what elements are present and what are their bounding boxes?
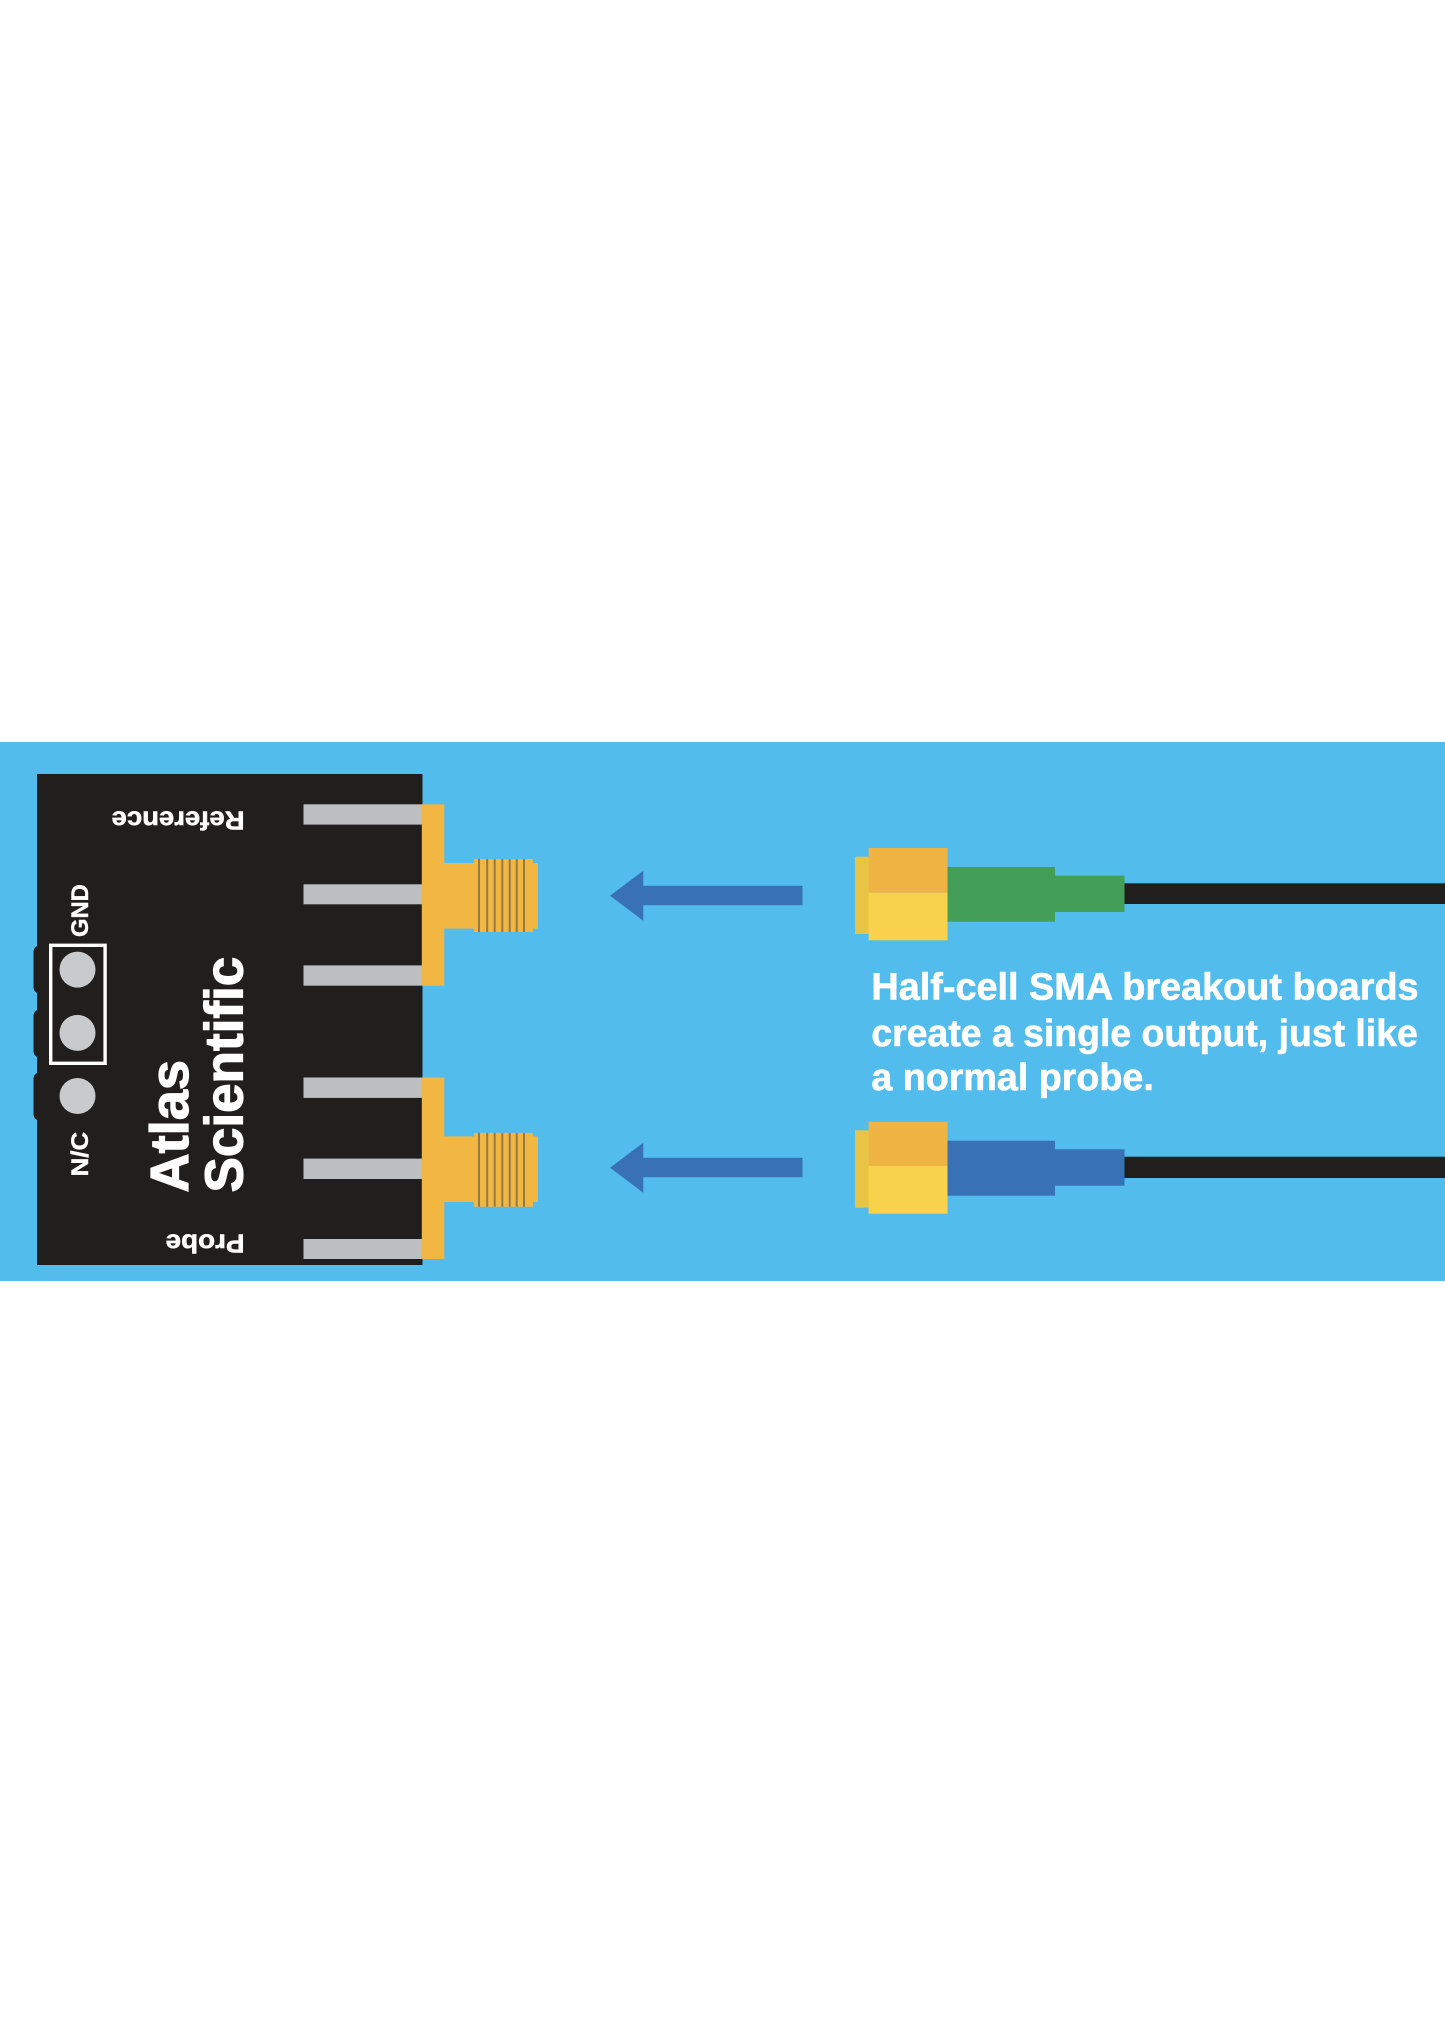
arrow: bottom, pointing left xyxy=(610,1143,802,1193)
panel: blue band xyxy=(0,742,1445,1281)
icon: blue probe connector and cable xyxy=(855,1122,1445,1214)
board body xyxy=(37,774,422,1265)
logo text: Atlas Scientific: Atlas xyxy=(140,1060,200,1192)
arrow: top, pointing left xyxy=(610,871,802,921)
board edge tabs xyxy=(34,946,37,1120)
pin box outline xyxy=(51,945,105,1063)
logo text: Atlas Scientific: Scientific xyxy=(194,957,254,1192)
gray contact pads xyxy=(304,804,422,1259)
icon: top SMA jack xyxy=(422,804,538,986)
text block: caption xyxy=(871,966,1419,1099)
label: Probe: Probe xyxy=(166,1228,245,1258)
text block: caption: Half-cell SMA breakout boards xyxy=(871,966,1419,1008)
pin holes xyxy=(60,952,96,1114)
label: N/C: N/C xyxy=(67,1132,94,1176)
logo text: Atlas Scientific xyxy=(140,957,254,1192)
icon: green probe connector and cable xyxy=(855,848,1445,940)
label: Reference: Reference xyxy=(112,805,245,835)
label: GND: GND xyxy=(67,884,94,937)
text block: caption: a normal probe. xyxy=(871,1057,1154,1099)
text block: caption: create a single output, just like xyxy=(871,1013,1418,1055)
icon: bottom SMA jack xyxy=(422,1078,538,1259)
panel: circuit board xyxy=(34,774,422,1265)
